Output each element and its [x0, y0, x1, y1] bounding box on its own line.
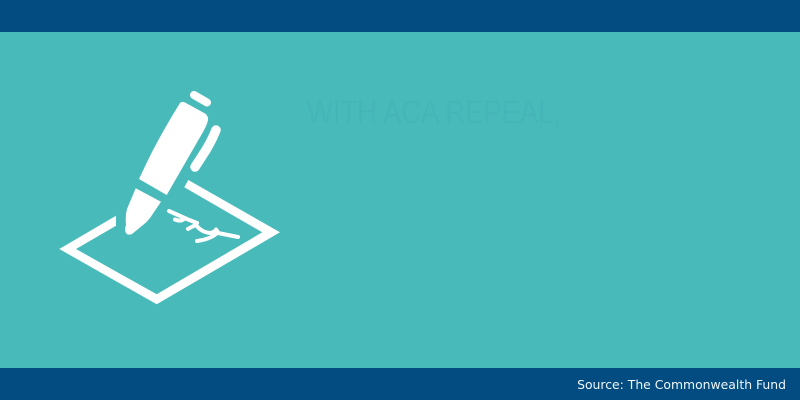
pen body	[139, 102, 208, 195]
signature	[169, 211, 238, 241]
bottom band	[0, 368, 800, 400]
document outline	[59, 180, 280, 304]
pen cap button	[194, 95, 207, 102]
pen clip	[195, 130, 216, 167]
pen tip	[125, 188, 161, 235]
heading: WITH ACA REPEAL,	[307, 94, 561, 130]
source credit: Source: The Commonwealth Fund	[577, 377, 786, 392]
top band	[0, 0, 800, 32]
